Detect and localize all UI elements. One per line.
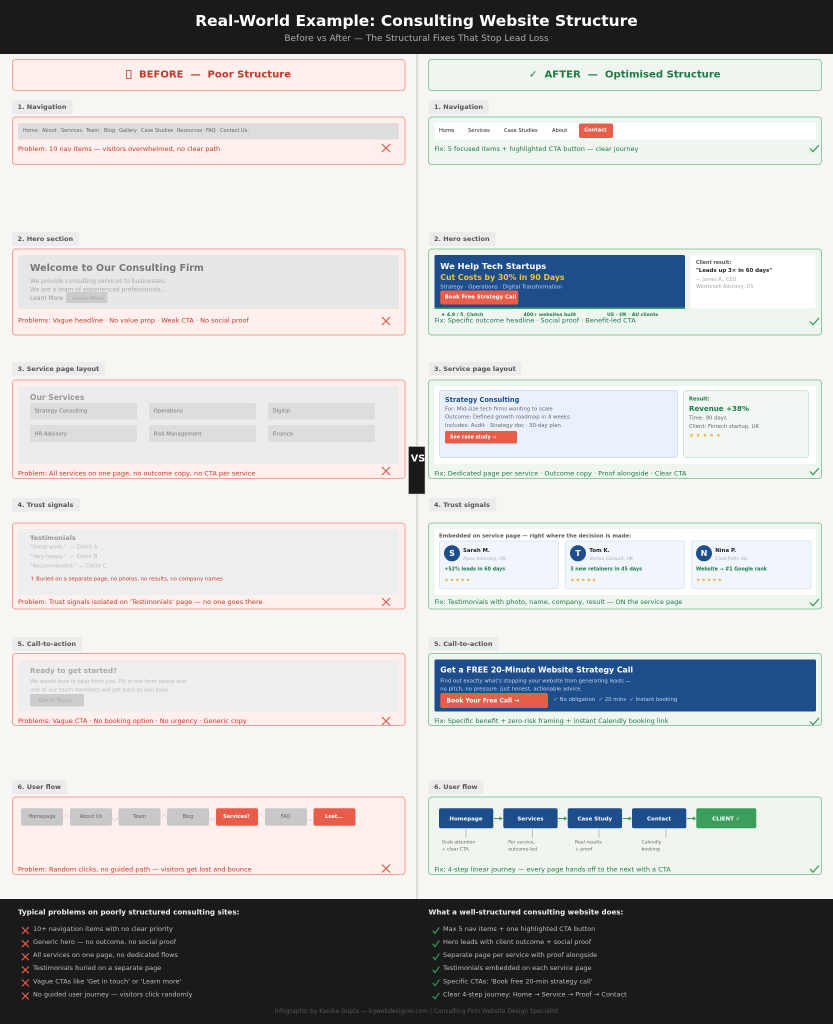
panel: before service: Finance xyxy=(272,431,293,437)
panel: before user flow: Services? xyxy=(223,814,250,820)
hero mock banner xyxy=(434,255,685,309)
title: Real-World Example: Consulting Website Structure xyxy=(195,12,638,30)
panel: after heading: AFTER — Optimised Structure xyxy=(544,70,721,80)
client result card: Westbrook Advisory, US xyxy=(696,284,753,290)
panel: before user flow: Homepage xyxy=(28,814,56,820)
testimonial: Sarah: S xyxy=(449,549,455,558)
panel: after trust: Embedded on service page — right where the decision is made: xyxy=(439,534,631,540)
testimonial: Nina: N xyxy=(701,549,707,558)
panel: before heading: BEFORE — Poor Structure xyxy=(139,70,291,80)
label: after 3 service: 3. Service page layout xyxy=(434,365,516,373)
service card: Outcome: Defined growth roadmap in 4 weeks xyxy=(445,415,570,421)
testimonial: Sarah: Apex Advisory, US xyxy=(463,556,506,562)
panel: before navigation: Services xyxy=(61,128,82,134)
service card xyxy=(440,390,678,458)
panel: before user flow: Problem: Random clicks, no guided path — visitors get lost and bounce xyxy=(18,866,252,874)
testimonial: Tom: 3 new retainers in 45 days xyxy=(570,567,642,573)
panel: after user flow: outcome-led xyxy=(508,846,537,852)
panel: after hero xyxy=(428,249,822,335)
panel: after user flow: + clear CTA xyxy=(442,846,469,852)
panel: before service xyxy=(12,380,405,478)
panel: before trust: "Great work." — Client A xyxy=(30,544,98,550)
panel: after hero: 400+ websites built xyxy=(524,312,577,318)
header banner xyxy=(0,0,833,54)
panel: before service: Digital xyxy=(272,409,290,415)
panel: after hero: US · UK · AU clients xyxy=(607,312,658,318)
testimonial: Nina: Website → #1 Google rank xyxy=(696,567,768,573)
panel: before navigation: Home xyxy=(23,128,38,134)
panel: before trust: "Recommended." — Client C xyxy=(30,564,107,570)
result card xyxy=(684,390,808,458)
service card: See case study → xyxy=(450,434,496,440)
label: before 6 flow: 6. User flow xyxy=(18,783,61,791)
panel: before cta: Problems: Vague CTA · No booking option · No urgency · Generic copy xyxy=(18,717,247,725)
footer: problems list: Typical problems on poorly structured consulting sites: xyxy=(18,908,240,916)
result card: Time: 90 days xyxy=(688,416,727,422)
panel: before navigation: Blog xyxy=(104,128,115,134)
service card: Includes: Audit · Strategy doc · 30-day plan xyxy=(445,423,561,429)
panel: before heading xyxy=(12,60,405,90)
label: after 2 hero: 2. Hero section xyxy=(434,235,490,243)
panel: after cta: no pitch, no pressure. Just honest, actionable advice. xyxy=(440,687,582,693)
label: before 5 cta xyxy=(12,637,82,651)
panel: before hero: Welcome to Our Consulting Firm xyxy=(30,263,204,274)
panel: before user flow: Blog xyxy=(182,814,194,820)
panel: before navigation: Resources xyxy=(177,128,203,134)
panel: before navigation: FAQ xyxy=(206,128,216,134)
footer: problems list: 10+ navigation items with no clear priority xyxy=(33,925,173,933)
panel: before service: Problem: All services on one page, no outcome copy, no CTA per service xyxy=(18,470,255,478)
panel: after navigation: About xyxy=(552,128,567,134)
subtitle: Before vs After — The Structural Fixes That Stop Lead Loss xyxy=(284,34,549,44)
testimonial: Nina: Nina P. xyxy=(715,548,736,554)
hero mock banner: Book Free Strategy Call xyxy=(445,294,516,300)
panel: before trust: Problem: Trust signals isolated on 'Testimonials' page — no one goes there xyxy=(18,598,263,606)
footer: fixes list xyxy=(428,908,627,999)
result card: ★★★★★ xyxy=(689,433,723,439)
panel: before navigation: Team xyxy=(85,128,99,134)
panel: before navigation: About xyxy=(42,128,57,134)
panel: after heading: ✓ xyxy=(529,70,537,80)
centre divider xyxy=(416,54,418,899)
panel: before navigation: Contact Us xyxy=(220,128,248,134)
panel: after navigation: Case Studies xyxy=(504,128,538,134)
panel: after user flow: + proof xyxy=(575,846,593,852)
footer band xyxy=(0,899,833,1024)
result card: Revenue +38% xyxy=(689,404,749,413)
footer: problems list: Testimonials buried on a separate page xyxy=(32,964,161,972)
panel: after cta: Find out exactly what's stopping your website from generating leads — xyxy=(440,678,631,684)
footer: fixes list: Max 5 nav items + one highlighted CTA button xyxy=(443,925,595,933)
footer: problems list: All services on one page, no dedicated flows xyxy=(33,951,178,959)
testimonial: Sarah xyxy=(440,541,558,588)
panel: after user flow: Contact xyxy=(647,816,671,822)
panel: before hero: Learn More xyxy=(30,295,64,302)
panel: after navigation: Fix: 5 focused items + highlighted CTA button — clear journey xyxy=(434,145,639,153)
label: after 4 trust xyxy=(428,498,496,512)
panel: before cta: one of our team members will get back to you soon. xyxy=(30,687,170,693)
panel: before service: Strategy Consulting xyxy=(34,409,88,415)
label: after 3 service xyxy=(428,362,522,376)
panel: after user flow xyxy=(428,797,822,874)
label: after 4 trust: 4. Trust signals xyxy=(434,501,490,509)
label: before 1 navigation: 1. Navigation xyxy=(18,103,67,111)
client result card xyxy=(690,256,816,308)
client result card: — James R., CEO xyxy=(696,277,736,283)
panel: before trust xyxy=(12,523,405,609)
panel: after navigation: Contact xyxy=(584,128,607,134)
client result card: Client result: xyxy=(696,260,731,266)
label: before 3 service xyxy=(12,362,105,376)
label: after 5 cta xyxy=(428,637,498,651)
panel: before user flow: About Us xyxy=(80,814,103,820)
label: before 2 hero xyxy=(12,232,79,246)
panel: after cta: Get a FREE 20-Minute Website Strategy Call xyxy=(440,666,633,674)
panel: after navigation xyxy=(428,117,822,164)
panel: before trust: "Very happy." — Client B xyxy=(30,554,98,560)
panel: before trust: ↑ Buried on a separate page, no photos, no results, no company names xyxy=(30,577,223,583)
testimonial: Tom xyxy=(566,541,684,588)
panel: after user flow: Homepage xyxy=(449,816,483,822)
panel: after user flow: CLIENT ✓ xyxy=(712,816,740,822)
panel: before navigation: Gallery xyxy=(119,128,137,134)
panel: after cta: Fix: Specific benefit + zero-risk framing + instant Calendly booking link xyxy=(434,717,669,725)
panel: after cta xyxy=(428,654,822,726)
panel: after service xyxy=(428,380,822,478)
label: before 3 service: 3. Service page layout xyxy=(18,365,99,373)
hero mock banner: Strategy · Operations · Digital Transformation xyxy=(440,284,562,290)
panel: before hero: Problems: Vague headline · No value prop · Weak CTA · No social proof xyxy=(18,316,250,324)
panel: before service: HR Advisory xyxy=(34,431,67,437)
label: after 6 flow: 6. User flow xyxy=(434,783,478,791)
panel: before navigation: Problem: 10 nav items — visitors overwhelmed, no clear path xyxy=(18,145,220,153)
panel: before user flow: Team xyxy=(132,814,146,820)
panel: before navigation: Case Studies xyxy=(141,128,174,134)
panel: before navigation xyxy=(12,117,405,164)
testimonial: Nina xyxy=(692,541,811,588)
testimonial: Nina: ClearPath, AU xyxy=(715,556,748,562)
panel: before hero xyxy=(12,249,405,335)
panel: before hero: We are a team of experienced professionals... xyxy=(30,286,166,294)
panel: after navigation: Home xyxy=(439,128,454,134)
panel: before service: Operations xyxy=(154,409,183,415)
footer: fixes list: Hero leads with client outcome + social proof xyxy=(443,938,592,946)
testimonial: Sarah: Sarah M. xyxy=(463,548,490,554)
panel: after cta: ✓ No obligation ✓ 20 mins ✓ Instant booking xyxy=(554,697,677,703)
panel: before cta: Ready to get started? xyxy=(30,666,117,675)
label: after 2 hero xyxy=(428,232,496,246)
footer: problems list: No guided user journey — visitors click randomly xyxy=(33,990,193,998)
label: before 6 flow xyxy=(12,780,67,794)
hero mock banner: Cut Costs by 30% in 90 Days xyxy=(440,273,565,282)
testimonial: Nina: ★★★★★ xyxy=(696,577,723,583)
client result card: "Leads up 3× in 60 days" xyxy=(696,268,772,274)
panel: after cta: Book Your Free Call → xyxy=(446,698,519,704)
label: after 1 navigation xyxy=(428,100,489,114)
footer: fixes list: What a well-structured consulting website does: xyxy=(428,908,624,916)
panel: after user flow: Fix: 4-step linear journey — every page hands off to the next with a CTA xyxy=(434,866,671,874)
panel: before cta: We would love to hear from you. Fill in the form below and xyxy=(30,679,186,685)
testimonial: Tom: ★★★★★ xyxy=(570,577,597,583)
service card: Strategy Consulting xyxy=(445,396,520,404)
label: before 5 cta: 5. Call-to-action xyxy=(18,640,76,648)
testimonial: Sarah: ★★★★★ xyxy=(444,577,471,583)
label: before 4 trust: 4. Trust signals xyxy=(18,501,74,509)
footer: fixes list: Clear 4-step journey: Home → Service → Proof → Contact xyxy=(443,990,627,998)
panel: after service: Fix: Dedicated page per service · Outcome copy · Proof alongside · Clear CTA xyxy=(434,470,687,478)
panel: before service: Risk Management xyxy=(154,431,201,437)
footer credit: Infographic by Kanika Gupta — kgwebdesigner.com | Consulting Firm Website Design Specialist xyxy=(275,1008,559,1015)
hero mock banner: We Help Tech Startups xyxy=(440,261,546,271)
service card: For: Mid-size tech firms wanting to scale xyxy=(445,406,553,412)
footer: problems list xyxy=(18,908,240,999)
panel: before cta: Get in Touch xyxy=(39,698,72,704)
label: before 4 trust xyxy=(12,498,80,512)
result card: Client: Fintech startup, UK xyxy=(689,424,759,430)
testimonial: Tom: T xyxy=(575,549,581,558)
panel: after user flow: Calendly xyxy=(642,840,662,846)
panel: after trust xyxy=(428,523,822,609)
panel: after user flow: Services xyxy=(517,816,544,822)
VS badge xyxy=(408,446,425,494)
panel: after user flow: Case Study xyxy=(577,816,613,822)
label: after 6 flow xyxy=(428,780,484,794)
panel: before trust: Testimonials xyxy=(30,534,76,542)
panel: before user flow: Lost... xyxy=(325,814,343,820)
footer: problems list: Generic hero — no outcome, no social proof xyxy=(33,938,177,946)
panel: after hero: ★ 4.9 / 5 Clutch xyxy=(441,312,483,318)
label: before 1 navigation xyxy=(12,100,72,114)
footer: fixes list: Separate page per service with proof alongside xyxy=(443,951,597,959)
panel: after hero: Fix: Specific outcome headline · Social proof · Benefit-led CTA xyxy=(434,316,636,324)
panel: before hero: Learn More xyxy=(73,296,104,302)
label: after 1 navigation: 1. Navigation xyxy=(434,103,483,111)
footer: fixes list: Testimonials embedded on each service page xyxy=(442,964,591,972)
panel: after user flow: Real results xyxy=(575,840,602,846)
label: before 2 hero: 2. Hero section xyxy=(18,235,73,243)
panel: after heading xyxy=(428,60,822,90)
panel: before user flow: FAQ xyxy=(281,814,290,820)
panel: after user flow: Per service, xyxy=(508,840,535,846)
panel: after user flow: Grab attention xyxy=(442,840,475,846)
testimonial: Tom: Tom K. xyxy=(589,548,610,554)
footer: problems list: Vague CTAs like 'Get in touch' or 'Learn more' xyxy=(33,977,182,985)
panel: after navigation: Services xyxy=(468,128,490,134)
panel: after user flow: booking xyxy=(642,846,660,852)
testimonial: Tom: Vertex Consult, UK xyxy=(589,556,634,562)
panel: before service: Our Services xyxy=(30,393,85,402)
footer: fixes list: Specific CTAs: 'Book free 20-min strategy call' xyxy=(443,977,593,985)
result card: Result: xyxy=(689,396,710,402)
panel: after trust: Fix: Testimonials with photo, name, company, result — ON the service page xyxy=(434,598,682,606)
testimonial: Sarah: +52% leads in 60 days xyxy=(444,567,505,573)
panel: before hero: We provide consulting services to businesses. xyxy=(30,278,167,285)
panel: before user flow xyxy=(12,797,405,874)
panel: before cta xyxy=(12,654,405,726)
VS badge: VS xyxy=(411,454,425,464)
label: after 5 cta: 5. Call-to-action xyxy=(434,640,493,648)
